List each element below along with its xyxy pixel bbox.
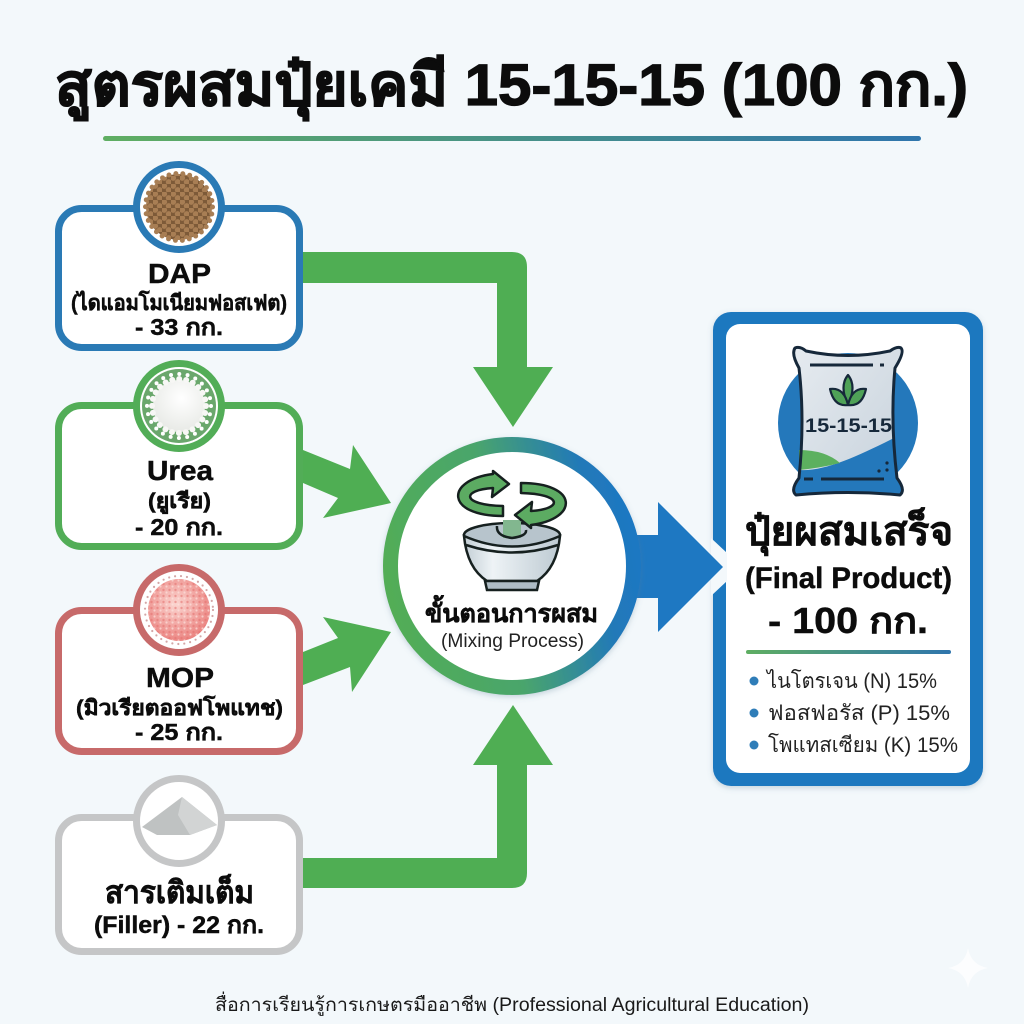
nutrient list: โพแทสเซียม (K) 15% [768,733,958,757]
frame notch [711,538,727,596]
arrow: MOP to mixing [303,617,391,692]
icon: filler pile [136,778,222,864]
stir arrow left [458,471,509,516]
nutrient list: ฟอสฟอรัส (P) 15% [768,702,950,725]
nutrient list [750,669,958,757]
DAP weight: - 33 กก. [135,314,223,340]
panel inner [726,324,970,773]
Urea name: Urea [147,455,213,486]
panel: final product [711,312,983,786]
product subtitle: (Final Product) [745,562,952,595]
title underline [103,136,921,141]
panel: mixing process [390,444,634,688]
card frame [58,818,300,952]
nutrient list: ไนโตรเจน (N) 15% [765,669,937,693]
Urea weight: - 20 กก. [135,514,223,540]
card: MOP [58,568,300,752]
watermark sparkle [948,948,988,988]
card: DAP [58,164,300,348]
arrow: mixing to final product [625,502,723,632]
arrow: Urea to mixing [303,445,391,518]
DAP name: DAP [148,258,211,289]
filler name: สารเติมเต็ม [105,873,254,910]
product weight: - 100 กก. [768,600,928,641]
Urea thai name: (ยูเรีย) [148,489,211,515]
icon: MOP crystals [136,568,222,652]
icon: DAP granules [136,164,222,250]
card frame [58,406,300,546]
card: filler [58,778,300,952]
panel frame [713,312,983,786]
icon: mixing bowl [458,471,566,590]
card frame [58,208,300,348]
product divider [746,650,951,654]
arrow: filler to mixing [303,705,553,888]
card frame [58,610,300,752]
title: สูตรผสมปุ๋ยเคมี 15-15-15 (100 กก.) [55,53,968,122]
mixing label english: (Mixing Process) [441,631,584,652]
mixing ring [390,444,634,688]
product heading: ปุ๋ยผสมเสร็จ [745,506,953,557]
stir arrow right [515,483,566,528]
arrow: DAP to mixing [303,252,553,427]
MOP thai name: (มิวเรียตออฟโพแทช) [76,695,283,720]
MOP name: MOP [146,662,214,693]
MOP weight: - 25 กก. [135,719,223,745]
leaf mark [830,375,866,405]
icon: urea prills [136,364,222,448]
DAP thai name: (ไดแอมโมเนียมฟอสเฟต) [71,290,287,315]
icon: fertilizer bag [778,347,918,495]
mixing label thai: ขั้นตอนการผสม [425,594,598,628]
filler weight: (Filler) - 22 กก. [94,912,264,939]
card: Urea [58,364,300,546]
footer note: สื่อการเรียนรู้การเกษตรมืออาชีพ (Professional Agricultural Education) [215,991,809,1016]
bag label: 15-15-15 [805,416,892,437]
